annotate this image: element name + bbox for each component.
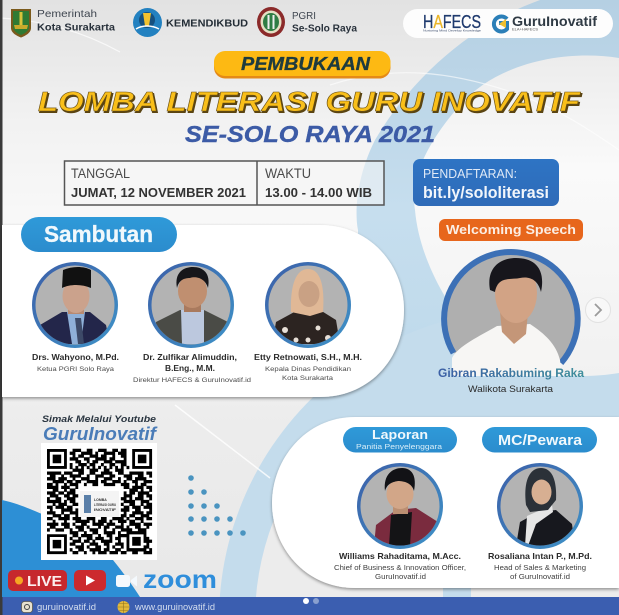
logo: PGRI: PGRI: [292, 11, 316, 22]
logo: PGRI: Se-Solo Raya: [292, 24, 357, 34]
footer bar: [0, 597, 619, 615]
heading: MC/Pewara: MC/Pewara: [498, 433, 583, 449]
name: Williams: Chief of Business & Innovation Officer,: [334, 565, 466, 572]
logo: Pemerintah Kota Surakarta: [11, 9, 115, 38]
title: LOMBA LITERASI GURU INOVATIF: [38, 86, 581, 117]
logo: PGRI: [257, 7, 357, 37]
name: Etty: [254, 353, 362, 382]
logo: GuruInovatif: [494, 14, 598, 32]
badge: Welcoming Speech: [439, 219, 583, 241]
badge: Pembukaan: PEMBUKAAN: [241, 53, 371, 74]
carousel pager dots: [303, 598, 319, 604]
registration box: bit.ly/sololiterasi: [423, 183, 549, 202]
name: Gibran: [438, 368, 585, 395]
name: Rosaliana: Rosaliana Intan P., M.Pd.: [488, 551, 592, 561]
icon: youtube play: [74, 570, 106, 591]
name: Williams: [334, 551, 466, 581]
icon: live badge: [8, 570, 67, 591]
name: Williams: Williams Rahaditama, M.Acc.: [339, 551, 461, 561]
name: Zulfikar: [133, 353, 251, 384]
logo: GuruInovatif: GuruInovatif: [512, 14, 598, 29]
name: Etty: Etty Retnowati, S.H., M.H.: [254, 353, 362, 362]
registration box: PENDAFTARAN:: [423, 166, 517, 181]
panel: laporan dan MC: [272, 417, 619, 588]
date and time box: TANGGAL: [71, 166, 130, 181]
icon: instagram: [22, 602, 32, 612]
header logos: [11, 7, 357, 38]
logo: zoom: [116, 566, 217, 594]
heading: Laporan: Laporan: [372, 427, 428, 442]
name: Wahyono: Ketua PGRI Solo Raya: [37, 366, 114, 373]
date and time box: [64, 161, 384, 205]
logo: Pemerintah Kota Surakarta: Pemerintah: [37, 9, 97, 20]
heading: Simak Melalui Youtube: [42, 414, 158, 444]
text: instagram handle: guruinovatif.id: [37, 602, 96, 612]
name: Rosaliana: [488, 551, 592, 581]
logo: HAFECS: Nurturing Mind Develop Knowledge: [423, 28, 481, 32]
name: Zulfikar: Direktur HAFECS & GuruInovatif.id: [133, 377, 251, 384]
logo: GuruInovatif: ELA+HAFECS: [512, 28, 538, 32]
date and time box: 13.00 - 14.00 WIB: [265, 185, 372, 200]
logo: Kemendikbud: [133, 8, 248, 37]
portrait: Wahyono: [32, 262, 118, 348]
heading: Laporan: [343, 427, 457, 452]
text: website: www.guruinovatif.id: [134, 602, 215, 612]
title: LOMBA LITERASI GURU INOVATIF: [39, 88, 582, 118]
icon: live badge: LIVE: [27, 573, 62, 590]
panel: sambutan: [2, 217, 404, 397]
name: Williams: GuruInovatif.id: [375, 574, 426, 581]
badge: Welcoming Speech: Welcoming Speech: [446, 222, 576, 237]
name: Zulfikar: Dr. Zulfikar Alimuddin,: [143, 353, 237, 362]
badge: Pembukaan: [214, 51, 390, 78]
logo: Kemendikbud: KEMENDIKBUD: [166, 18, 248, 30]
QR code: LITERASI GURU: [94, 503, 116, 507]
heading: Sambutan: Sambutan: [44, 221, 153, 247]
QR code: LOMBA: [94, 498, 107, 502]
portrait: Williams: [357, 463, 443, 549]
icon: globe: [118, 601, 130, 613]
name: Wahyono: Drs. Wahyono, M.Pd.: [32, 353, 119, 362]
date and time box: JUMAT, 12 NOVEMBER 2021: [71, 185, 246, 200]
decorative dots triangle: [188, 475, 246, 536]
registration box: [413, 159, 559, 206]
name: Etty: Kota Surakarta: [282, 375, 333, 382]
heading: Simak Melalui Youtube: GuruInovatif: [43, 423, 158, 444]
portrait: Gibran: [444, 252, 578, 376]
name: Wahyono: [32, 353, 119, 373]
name: Gibran: Gibran Rakabuming Raka: [438, 368, 585, 380]
QR code: INOVATIF: [94, 508, 117, 512]
heading: MC/Pewara: [482, 427, 597, 452]
date and time box: WAKTU: [265, 166, 311, 181]
subtitle: SE-SOLO RAYA 2021: [185, 121, 435, 147]
logo: Pemerintah Kota Surakarta: Kota Surakarta: [37, 22, 115, 34]
heading: Laporan: Panitia Penyelenggara: [356, 442, 443, 451]
name: Zulfikar: B.Eng., M.M.: [165, 364, 215, 373]
heading: Sambutan: [21, 217, 177, 252]
name: Etty: Kepala Dinas Pendidikan: [265, 366, 351, 373]
icon: next arrow button: [586, 298, 610, 322]
name: Rosaliana: Head of Sales & Marketing: [494, 565, 586, 572]
heading: Simak Melalui Youtube: Simak Melalui Youtube: [42, 414, 157, 425]
portrait: Zulfikar: [148, 262, 234, 348]
portrait: Etty: [265, 262, 351, 348]
partner logos pill: [403, 9, 613, 38]
QR code: [41, 443, 157, 560]
name: Rosaliana: of GuruInovatif.id: [510, 574, 570, 581]
name: Gibran: Walikota Surakarta: [468, 384, 554, 395]
logo: HAFECS: HAFECS: [423, 12, 481, 32]
bottom left blue shape: [2, 500, 140, 597]
portrait: Rosaliana: [497, 463, 583, 549]
logo: zoom: zoom: [143, 566, 217, 594]
